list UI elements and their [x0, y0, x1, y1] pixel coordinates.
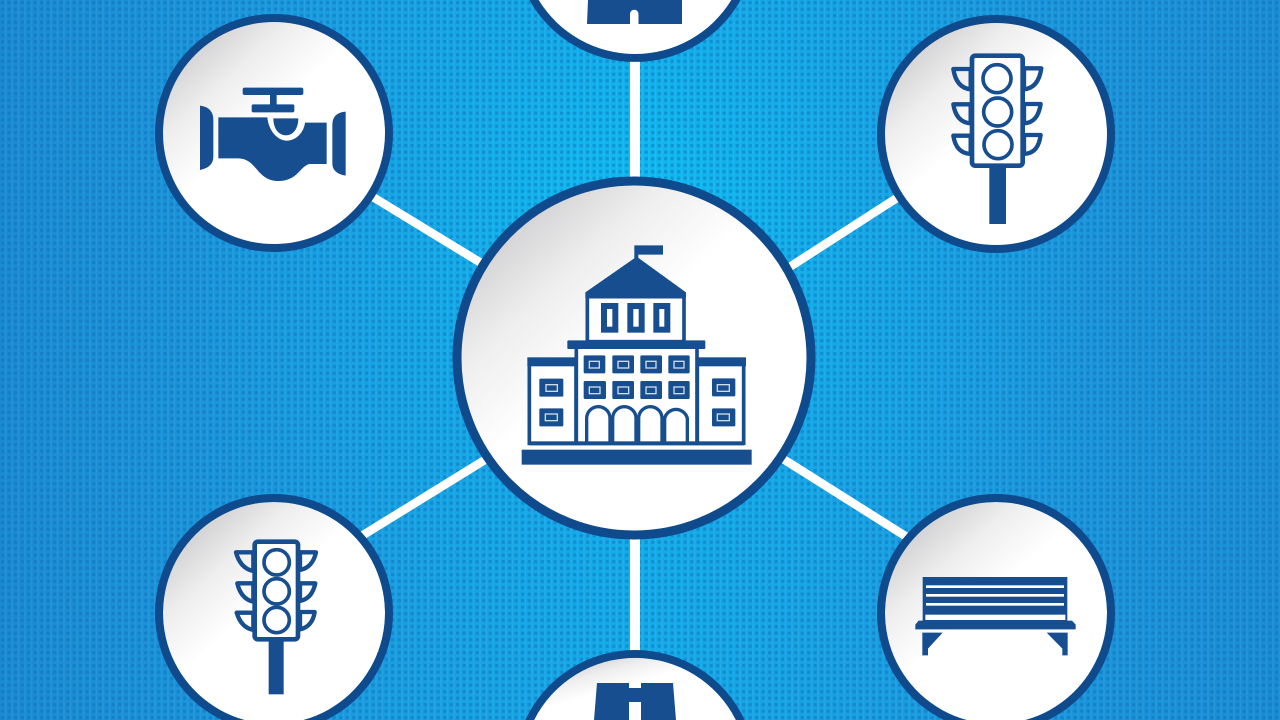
icon: pipe valve: [200, 88, 346, 181]
icon: civic building: [522, 245, 752, 465]
window glazing marks: [545, 361, 729, 421]
node: bottom building (cropped): [525, 650, 745, 720]
arches: [587, 407, 687, 443]
node: central civic building hub: [457, 181, 811, 535]
upper windows: [604, 306, 667, 330]
connector lines: hub to outer nodes: [360, 55, 910, 655]
roof: [585, 257, 686, 298]
main block: [576, 347, 697, 443]
node: pipe valve: [159, 18, 389, 248]
upper storey: [587, 297, 684, 342]
icon: traffic light: [236, 542, 316, 694]
base: [529, 441, 744, 445]
node: traffic light top right: [881, 19, 1111, 249]
wings: [529, 359, 576, 443]
icon: traffic light: [953, 56, 1041, 224]
node: traffic light bottom left: [155, 494, 393, 720]
node: top building (cropped): [529, 0, 741, 62]
window grid: [539, 355, 735, 426]
icon: park bench: [915, 577, 1076, 655]
flag: [634, 245, 663, 260]
node: park bench: [877, 494, 1115, 720]
